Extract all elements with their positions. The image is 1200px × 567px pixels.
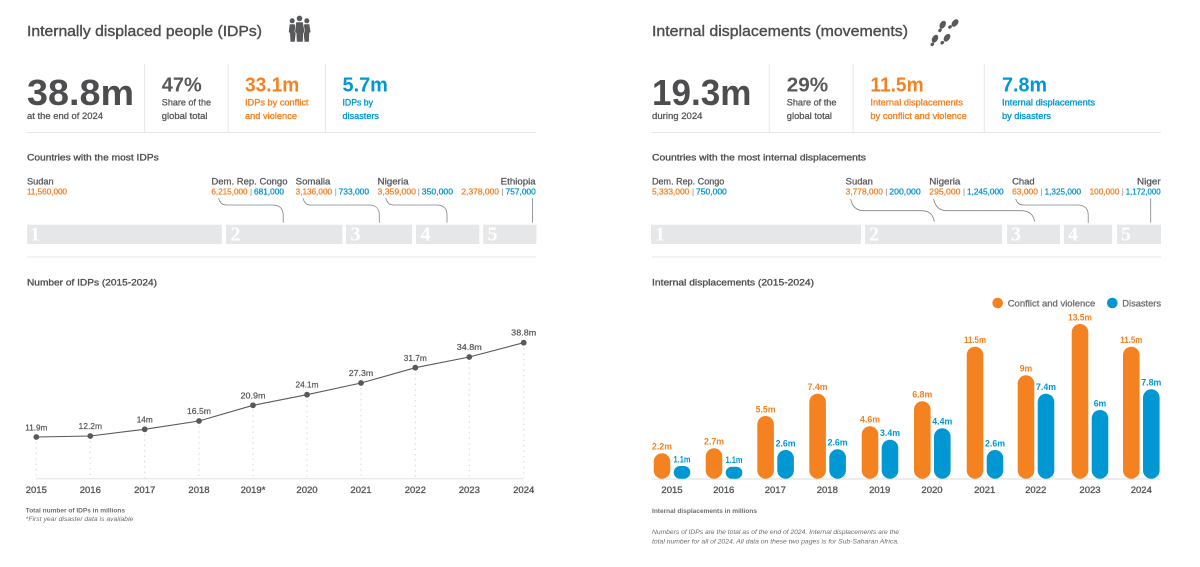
stat block: displacements by conflict: 11.5m: [870, 75, 924, 97]
year axis labels: 2020: [921, 485, 943, 496]
country: Nigeria: |: [418, 188, 420, 197]
year axis labels: 2018: [817, 485, 838, 496]
country: Somalia: |: [335, 188, 337, 197]
year axis labels: 2020: [296, 485, 318, 496]
icon: footprints: [930, 18, 960, 47]
data labels: 31.7m: [404, 353, 427, 363]
data line: [36, 343, 524, 437]
icon: group of people: [289, 16, 311, 42]
year axis labels: 2015: [661, 485, 683, 496]
line chart: number of IDPs 2015-2024: [25, 328, 536, 496]
stat block: IDPs by conflict: [245, 75, 309, 121]
country: Ethiopia: |: [501, 188, 503, 197]
country: Niger: 1,172,000: [1126, 188, 1161, 197]
year axis labels: [661, 485, 1152, 496]
country: Dem. Rep. Congo: Dem. Rep. Congo: [652, 177, 724, 187]
country: Dem. Rep. Congo: [652, 177, 727, 197]
disasters value labels: 3.4m: [880, 428, 900, 438]
year axis labels: 2019*: [241, 485, 266, 496]
year axis labels: 2021: [974, 485, 995, 496]
conflict value labels: 5.5m: [756, 404, 776, 414]
year axis labels: 2024: [513, 485, 534, 496]
heading: internal displacements: Internal displacements (movements): [652, 23, 908, 40]
ranking: countries with the most IDPs: [27, 177, 536, 246]
stat block: displacements by disasters: by disasters: [1002, 111, 1051, 121]
footnote: bar chart: Internal displacements in millions: [652, 508, 757, 515]
legend: Conflict and violence: [1008, 298, 1095, 309]
ranked bars: 1: [30, 224, 40, 246]
country: Somalia: 3,136,000: [296, 188, 333, 197]
stat block: IDPs by conflict: 33.1m: [245, 75, 299, 97]
country: Dem. Rep. Congo: |: [692, 188, 694, 197]
stat block: headline total: at the end of 2024: [27, 111, 103, 121]
country: Chad: 63,000: [1012, 188, 1038, 197]
year axis labels: 2018: [188, 485, 210, 496]
country: Dem. Rep. Congo: [211, 177, 288, 197]
year axis labels: 2019: [869, 485, 890, 496]
country: Dem. Rep. Congo: 5,333,000: [652, 188, 690, 197]
stat block: headline total: 38.8m: [27, 72, 134, 113]
country: Nigeria: 295,000: [929, 188, 961, 197]
country: Sudan: Sudan: [846, 177, 873, 187]
stat block: global share: global total: [787, 111, 832, 121]
ranked bars: 2: [230, 224, 240, 246]
note: data definitions: [652, 529, 899, 545]
country: Sudan: [846, 177, 921, 197]
country: Dem. Rep. Congo: |: [250, 188, 252, 197]
country: Nigeria: 1,245,000: [967, 188, 1004, 197]
stat block: IDPs by disasters: disasters: [342, 111, 380, 121]
year axis labels: 2024: [1131, 485, 1152, 496]
stat block: IDPs by disasters: IDPs by: [342, 97, 373, 107]
legend: Disasters: [1122, 298, 1161, 309]
data labels: 14m: [137, 415, 153, 425]
panel: internal displacements: [651, 18, 1161, 545]
year axis labels: 2023: [1079, 485, 1101, 496]
country: Niger: Niger: [1137, 177, 1161, 187]
data labels: [25, 328, 536, 432]
data labels: 16.5m: [187, 406, 211, 416]
country: Somalia: Somalia: [296, 177, 330, 187]
stat block: IDPs by disasters: 5.7m: [342, 75, 388, 97]
heading: countries with the most IDPs: Countries with the most IDPs: [27, 153, 159, 164]
heading: countries with the most internal displacements: Countries with the most internal displacements: [652, 153, 866, 164]
country: Ethiopia: [461, 177, 536, 197]
disasters value labels: 4.4m: [932, 417, 952, 427]
country: Nigeria: 350,000: [422, 188, 454, 197]
country: Somalia: 733,000: [339, 188, 370, 197]
ranked bars: [651, 224, 1161, 246]
ranked bars: 3: [350, 224, 360, 246]
stat block: headline total: 19.3m: [652, 72, 751, 113]
ranked bars: 5: [488, 224, 498, 246]
stat block: IDPs by conflict: and violence: [245, 111, 297, 121]
country: Dem. Rep. Congo: 750,000: [696, 188, 727, 197]
country: Niger: |: [1122, 188, 1124, 197]
country: Ethiopia: 757,000: [506, 188, 536, 197]
country: Sudan: 200,000: [889, 188, 921, 197]
stat block: displacements by conflict: Internal displacements: [870, 97, 963, 107]
disasters value labels: 2.6m: [828, 438, 848, 448]
country: Chad: [1012, 177, 1082, 197]
conflict value labels: 9m: [1020, 364, 1032, 374]
legend: [992, 298, 1161, 309]
ranked bars: 4: [420, 224, 430, 246]
country: Nigeria: |: [963, 188, 965, 197]
stat block: IDPs by conflict: IDPs by conflict: [245, 97, 309, 107]
bar chart: internal displacements 2015-2024: [652, 312, 1161, 496]
country: Nigeria: [378, 177, 454, 197]
connector lines: [219, 198, 532, 223]
disasters bars: [674, 389, 1160, 479]
heading: number of IDPs: Number of IDPs (2015-2024): [27, 278, 157, 288]
stat block: headline total: during 2024: [652, 111, 702, 121]
data labels: 27.3m: [349, 368, 373, 378]
country: Nigeria: Nigeria: [929, 177, 960, 187]
conflict value labels: [652, 312, 1142, 452]
conflict value labels: 13.5m: [1068, 312, 1092, 322]
year axis labels: [26, 485, 534, 496]
stat block: global share: [162, 75, 211, 121]
country: Sudan: 11,560,000: [27, 188, 68, 197]
year axis labels: 2021: [350, 485, 372, 496]
data points: [33, 340, 527, 440]
data labels: 11.9m: [25, 422, 47, 432]
conflict value labels: 11.5m: [1120, 335, 1142, 345]
disasters value labels: 2.6m: [776, 438, 796, 448]
country: Sudan: 3,778,000: [846, 188, 883, 197]
country: Ethiopia: Ethiopia: [501, 177, 536, 187]
conflict value labels: 2.2m: [652, 442, 672, 452]
country: Niger: [1090, 177, 1161, 197]
disasters value labels: 7.4m: [1036, 382, 1056, 392]
stat block: IDPs by disasters: [342, 75, 388, 121]
year axis labels: 2016: [80, 485, 101, 496]
data labels: 12.2m: [79, 421, 102, 431]
stat block: displacements by disasters: Internal displacements: [1002, 97, 1096, 107]
year axis labels: 2015: [26, 485, 47, 496]
conflict and violence bars: [654, 324, 1140, 479]
country: Chad: |: [1041, 188, 1043, 197]
country: Nigeria: Nigeria: [378, 177, 409, 187]
country: Chad: Chad: [1012, 177, 1035, 187]
disasters value labels: 1.1m: [674, 454, 690, 464]
stat block: displacements by disasters: [1002, 75, 1096, 121]
country: Chad: 1,325,000: [1045, 188, 1082, 197]
footnote: line chart: [26, 507, 134, 523]
data labels: 20.9m: [240, 391, 266, 401]
stat block: displacements by conflict: [870, 75, 967, 121]
disasters value labels: 1.1m: [726, 455, 742, 465]
conflict value labels: 6.8m: [912, 390, 932, 400]
panel: internally displaced people: [25, 16, 536, 523]
ranked bars: 2: [869, 224, 879, 246]
stat block: displacements by disasters: 7.8m: [1002, 75, 1047, 97]
ranked bars: [27, 224, 536, 246]
country: Dem. Rep. Congo: 681,000: [254, 188, 285, 197]
country: Ethiopia: 2,378,000: [461, 188, 500, 197]
country: Nigeria: 3,359,000: [378, 188, 417, 197]
disasters value labels: 7.8m: [1141, 378, 1161, 388]
country: Sudan: [27, 177, 68, 197]
heading: internal displacements by year: Internal displacements (2015-2024): [652, 278, 814, 288]
ranking: countries with the most internal displacements: [651, 177, 1161, 246]
country: Nigeria: [929, 177, 1004, 197]
year axis labels: 2017: [134, 485, 155, 496]
ranked bars: 3: [1011, 224, 1021, 246]
stat block: global share: [787, 75, 836, 121]
stat block: global share: global total: [162, 111, 208, 121]
year axis labels: 2017: [765, 485, 786, 496]
conflict value labels: 7.4m: [808, 382, 828, 392]
year axis labels: 2022: [1025, 485, 1046, 496]
year axis labels: 2022: [405, 485, 426, 496]
data labels: 38.8m: [511, 328, 536, 338]
stat block: displacements by conflict: by conflict and violence: [870, 111, 967, 121]
country: Somalia: [296, 177, 370, 197]
conflict value labels: 11.5m: [964, 335, 986, 345]
stat block: global share: 29%: [787, 75, 828, 97]
country: Sudan: |: [885, 188, 887, 197]
stat block: global share: Share of the: [162, 97, 211, 107]
note: data definitions: Numbers of IDPs are the total as of the end of 2024. Internal displacements are the: [652, 529, 899, 536]
heading: internally displaced people: Internally displaced people (IDPs): [27, 23, 262, 40]
disasters value labels: 6m: [1094, 398, 1106, 408]
disasters value labels: 2.6m: [985, 438, 1005, 448]
footnote: line chart: Total number of IDPs in millions: [26, 507, 125, 514]
country: Sudan: Sudan: [27, 177, 54, 187]
connector lines: [851, 198, 1151, 223]
data labels: 24.1m: [296, 380, 318, 390]
country: Dem. Rep. Congo: Dem. Rep. Congo: [211, 177, 288, 187]
data labels: 34.8m: [457, 342, 482, 352]
year axis labels: 2023: [459, 485, 480, 496]
stat block: global share: Share of the: [787, 97, 836, 107]
conflict value labels: 4.6m: [860, 415, 880, 425]
footnote: line chart: *First year disaster data is available: [26, 516, 134, 523]
note: data definitions: total number for all of 2024. All data on these two pages is for Sub-Saharan Africa.: [652, 538, 899, 545]
country: Dem. Rep. Congo: 6,215,000: [211, 188, 248, 197]
stat block: global share: 47%: [162, 75, 202, 97]
conflict value labels: 2.7m: [704, 437, 724, 447]
disasters value labels: [674, 378, 1161, 465]
ranked bars: 5: [1121, 224, 1131, 246]
ranked bars: 1: [655, 224, 665, 246]
country: Niger: 100,000: [1090, 188, 1120, 197]
ranked bars: 4: [1068, 224, 1078, 246]
year axis labels: 2016: [713, 485, 734, 496]
